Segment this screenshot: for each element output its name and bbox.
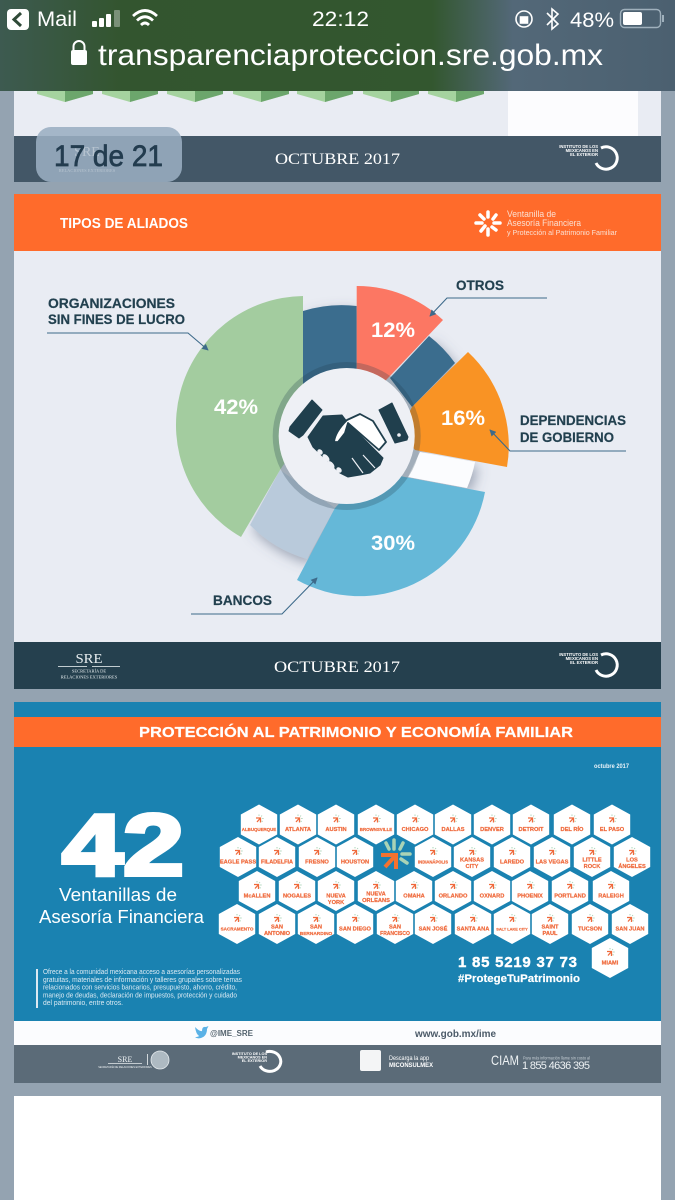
hex: San Diego [337,904,373,944]
hex: Salt Lake City [494,904,530,944]
hex: San Bernardino: BERNARDINO [300,931,333,937]
segment: otros 12% [357,286,443,411]
logo: Instituto de los Mexicanos en el Exterior: EL EXTERIOR [570,660,598,665]
hex: Kansas City: KANSAS [460,858,484,864]
app download text: MICONSULMEX [389,1062,434,1069]
faded SRE logo behind counter: RELACIONES EXTERIORES [59,168,116,173]
hex: Santa Ana [455,904,491,944]
hex: San Bernardino [298,904,334,944]
hex: Tucson: TUCSON [578,926,602,932]
hex: San Francisco [377,904,413,944]
description text block [36,969,242,1008]
callout: dependencias de gobierno [490,413,626,451]
hex: Sacramento: SACRAMENTO [221,926,254,932]
hex: San Francisco: SAN [389,924,401,930]
app download text: Descarga la app [389,1055,429,1062]
green hexagon bottoms [37,91,484,102]
icon: signal bars [92,10,120,27]
hex: San Francisco: FRANCISCO [380,931,410,937]
hex: Omaha: OMAHA [403,894,425,900]
callout: organizaciones: SIN FINES DE LUCRO [48,312,185,327]
hex: Chicago [397,804,433,844]
hex: Little Rock: ROCK [584,864,601,870]
heading: TIPOS DE ALIADOS [60,216,188,232]
callout: bancos [191,578,317,614]
logo: Instituto de los Mexicanos en el Exterior: EL EXTERIOR [570,152,598,157]
panel: previous slide remainder [14,91,661,136]
CIAM contact: Para más información llame sin costo al [523,1056,590,1060]
orange title band [14,717,661,747]
hex: Raleigh: RALEIGH [598,894,624,900]
footer bar: logos and contact [14,1045,661,1083]
phone number: 1 85 5219 37 73 [458,954,577,971]
icon: bluetooth [547,9,558,29]
logo caption: y Protección al Patrimonio Familiar [507,228,617,237]
hex: Eagle Pass: EAGLE PASS [220,860,256,866]
callout: organizaciones [47,296,208,350]
hex: Del Río [554,804,590,844]
hex: Portland [552,871,588,911]
logo: SRE: SECRETARÍA DE [72,668,106,674]
hex: Albuquerque [241,804,277,844]
hex: Los Ángeles [614,837,650,877]
hex: San José: SAN JOSÉ [419,924,448,932]
subtitle: Ventanillas de [59,884,177,905]
subtitle [39,884,205,927]
hex: Houston [337,837,373,877]
url: transparenciaproteccion.sre.gob.mx [98,39,603,72]
hex: Filadelfia: FILADELFIA [261,860,293,866]
hex: Nueva York: NUEVA [326,894,346,900]
hex: Portland: PORTLAND [554,894,586,900]
hex: Miami [592,938,628,978]
hex: Las Vegas: LAS VEGAS [536,860,569,866]
segment: organizaciones 42% [176,296,303,537]
hex: Dallas: DALLAS [441,827,465,833]
hex: Nueva York: YORK [328,900,345,906]
panel: tipos de aliados [14,194,661,642]
hex: Indianápolis: INDIANÁPOLIS [418,860,448,864]
logo: Instituto de los Mexicanos en el Exterior [232,1051,281,1071]
hex: Filadelfia [259,837,295,877]
hex: San Diego: SAN DIEGO [339,926,372,932]
logo caption: Ventanilla de [507,209,556,220]
panel: protección al patrimonio [14,702,661,1022]
panel: next slide start [14,1096,661,1200]
logo: Instituto de los Mexicanos en el Exterior: MEXICANOS EN [566,656,598,661]
hex: Little Rock [574,837,610,877]
hex: Kansas City: CITY [466,864,479,870]
logo: Instituto de los Mexicanos en el Exterior: INSTITUTO DE LOS [232,1052,267,1056]
contact band [14,1021,661,1045]
hex: Nogales [279,871,315,911]
counter text: 17 de 21 [54,140,163,173]
icon: handshake [289,400,408,477]
logo: SRE and seal: SRE [118,1055,132,1064]
hex: Chicago: CHICAGO [402,827,429,833]
footer date: OCTUBRE 2017 [275,151,400,168]
hex: Brownsville [358,804,394,844]
hex: Little Rock: LITTLE [582,858,602,864]
hex: Salt Lake City: SALT LAKE CITY [496,926,528,932]
hex: Detroit: DETROIT [519,827,544,833]
app icon [360,1050,381,1071]
CIAM contact [491,1052,590,1072]
logo: Instituto de los Mexicanos en el Exterior: INSTITUTO DE LOS [559,652,598,657]
hex: Brownsville: BROWNSVILLE [360,827,392,832]
value: 42%: 42% [214,396,258,419]
hex: Orlando [435,871,471,911]
icon: twitter bird [195,1026,208,1038]
icon: battery [620,10,664,28]
website: www.gob.mx/ime [414,1029,496,1040]
hex: San Antonio: ANTONIO [264,931,291,937]
description text block: manejo de deudas, declaración de impuestos, protección y cuidado [43,992,237,1000]
hex: Tucson [572,904,608,944]
hex: Nogales: NOGALES [283,894,311,900]
hex: Omaha [396,871,432,911]
hex: Dallas [435,804,471,844]
center ring [276,365,418,507]
value: 16%: 16% [441,407,485,430]
callout: dependencias de gobierno: DE GOBIERNO [520,430,614,445]
CIAM contact: CIAM [491,1052,519,1068]
hex: Los Ángeles: ÁNGELES [618,863,646,870]
icon: ventanilla logo [476,212,500,235]
orange title band: PROTECCIÓN AL PATRIMONIO Y ECONOMÍA FAMILIAR [139,723,574,741]
description text block: Ofrece a la comunidad mexicana acceso a asesorías personalizadas [43,969,240,976]
hex: Saint Paul [532,904,568,944]
hex: Miami: MIAMI [602,960,619,966]
hex: Fresno: FRESNO [305,860,329,866]
logo: Instituto de los Mexicanos en el Exterior: EL EXTERIOR [242,1059,267,1063]
footer bar: previous slide [14,136,661,182]
callout: organizaciones: ORGANIZACIONES [48,296,175,311]
battery percent: 48% [570,9,614,32]
hex: McAllen: McALLEN [244,894,270,900]
segment: bancos 30% [297,470,485,596]
hex: Los Ángeles: LOS [626,858,638,864]
orange heading band [14,194,661,251]
logo: SRE: SRE [76,652,102,667]
hex: Eagle Pass [220,837,256,877]
hex: Las Vegas [534,837,570,877]
subtitle: Asesoría Financiera [39,906,205,927]
logo: Instituto de los Mexicanos en el Exterior: INSTITUTO DE LOS [559,144,598,149]
hex: Orlando: ORLANDO [439,894,468,900]
clock: 22:12 [312,8,369,31]
hex: Albuquerque: ALBUQUERQUE [242,827,276,832]
logo: Instituto de los Mexicanos en el Exterior: MEXICANOS EN [238,1056,267,1060]
hex: San José [415,904,451,944]
hex: Nueva Orleans [358,871,394,911]
page counter badge [36,127,182,182]
faded SRE logo behind counter: SRE [74,145,100,160]
icon: rotation lock [516,11,532,27]
icon: center ventanilla logo [381,840,410,869]
hex: Nueva Orleans: ORLEANS [362,898,390,904]
hex: Atlanta [280,804,316,844]
hex: San Antonio: SAN [271,924,283,930]
logo: Instituto de los Mexicanos en el Exterior [559,144,617,169]
hex: San Antonio [259,904,295,944]
logo: SRE [58,652,120,680]
description text block: del patrimonio, entre otros. [43,1000,123,1007]
footer date: OCTUBRE 2017 [274,659,400,676]
hexagon grid of cities [219,804,650,978]
date label: octubre 2017 [594,764,630,770]
hex: Santa Ana: SANTA ANA [457,926,489,932]
CIAM contact: 1 855 4636 395 [522,1060,590,1072]
big number 42: 42 [62,797,184,894]
hex: Saint Paul: PAUL [542,931,558,937]
logo: Instituto de los Mexicanos en el Exterior [559,652,617,676]
base ring segments [250,305,475,559]
callout: bancos: BANCOS [213,593,272,608]
segment: dependencias 16% [400,352,509,467]
twitter handle: @IME_SRE [210,1029,254,1038]
logo: Instituto de los Mexicanos en el Exterior: MEXICANOS EN [566,148,598,153]
callout: dependencias de gobierno: DEPENDENCIAS [520,413,626,428]
hex: Oxnard [474,871,510,911]
hashtag: #ProtegeTuPatrimonio [458,973,580,985]
hex: Houston: HOUSTON [341,860,369,866]
hex: Austin [318,804,354,844]
hex: Kansas City [454,837,490,877]
hex: Del Río: DEL RÍO [561,825,584,833]
hex: El Paso: EL PASO [600,827,625,833]
hex: Austin: AUSTIN [325,827,347,833]
footer bar: tipos de aliados [14,642,661,689]
hex: Denver: DENVER [480,827,504,833]
icon: padlock [71,41,87,65]
hex: Nueva Orleans: NUEVA [366,892,386,898]
value: 30%: 30% [371,532,415,555]
logo caption [507,209,617,237]
hex: Saint Paul: SAINT [541,924,559,930]
description text block: gratuitas, materiales de información y talleres grupales sobre temas [43,977,242,984]
callout: otros [430,278,547,316]
hex: Sacramento [219,904,255,944]
center disc [279,368,415,504]
hex: Phoenix: PHOENIX [517,894,543,900]
hex: El Paso [594,804,630,844]
value: 12%: 12% [371,319,415,342]
hex: Oxnard: OXNARD [480,894,504,900]
browser status header [0,0,675,91]
carrier label: Mail [37,8,77,31]
hex: Laredo [494,837,530,877]
hex: Atlanta: ATLANTA [285,827,311,833]
app download text [389,1055,434,1069]
hex: Laredo: LAREDO [500,860,525,866]
logo caption: Asesoría Financiera [507,218,582,229]
hex: Raleigh [593,871,629,911]
hex: San Juan [612,904,648,944]
donut chart [176,286,509,596]
description text block: relacionados con servicios bancarios, presupuesto, ahorro, crédito, [43,984,237,992]
faded SRE logo behind counter [59,145,116,173]
logo: SRE: RELACIONES EXTERIORES [61,674,118,680]
logo: SRE and seal: SECRETARÍA DE RELACIONES EXTERIORES [98,1066,152,1069]
hex: Nueva York [318,871,354,911]
callout: otros: OTROS [456,278,504,293]
hex: San Bernardino: SAN [310,924,322,930]
icon: wifi [133,10,157,25]
hex: Fresno [299,837,335,877]
hex: McAllen [239,871,275,911]
hex: Detroit [513,804,549,844]
hex: Indianápolis [415,837,451,877]
logo: SRE and seal [98,1051,169,1069]
hex: Denver [474,804,510,844]
hex: San Juan: SAN JUAN [615,926,645,932]
icon: back button [7,9,29,30]
hex: Phoenix [512,871,548,911]
